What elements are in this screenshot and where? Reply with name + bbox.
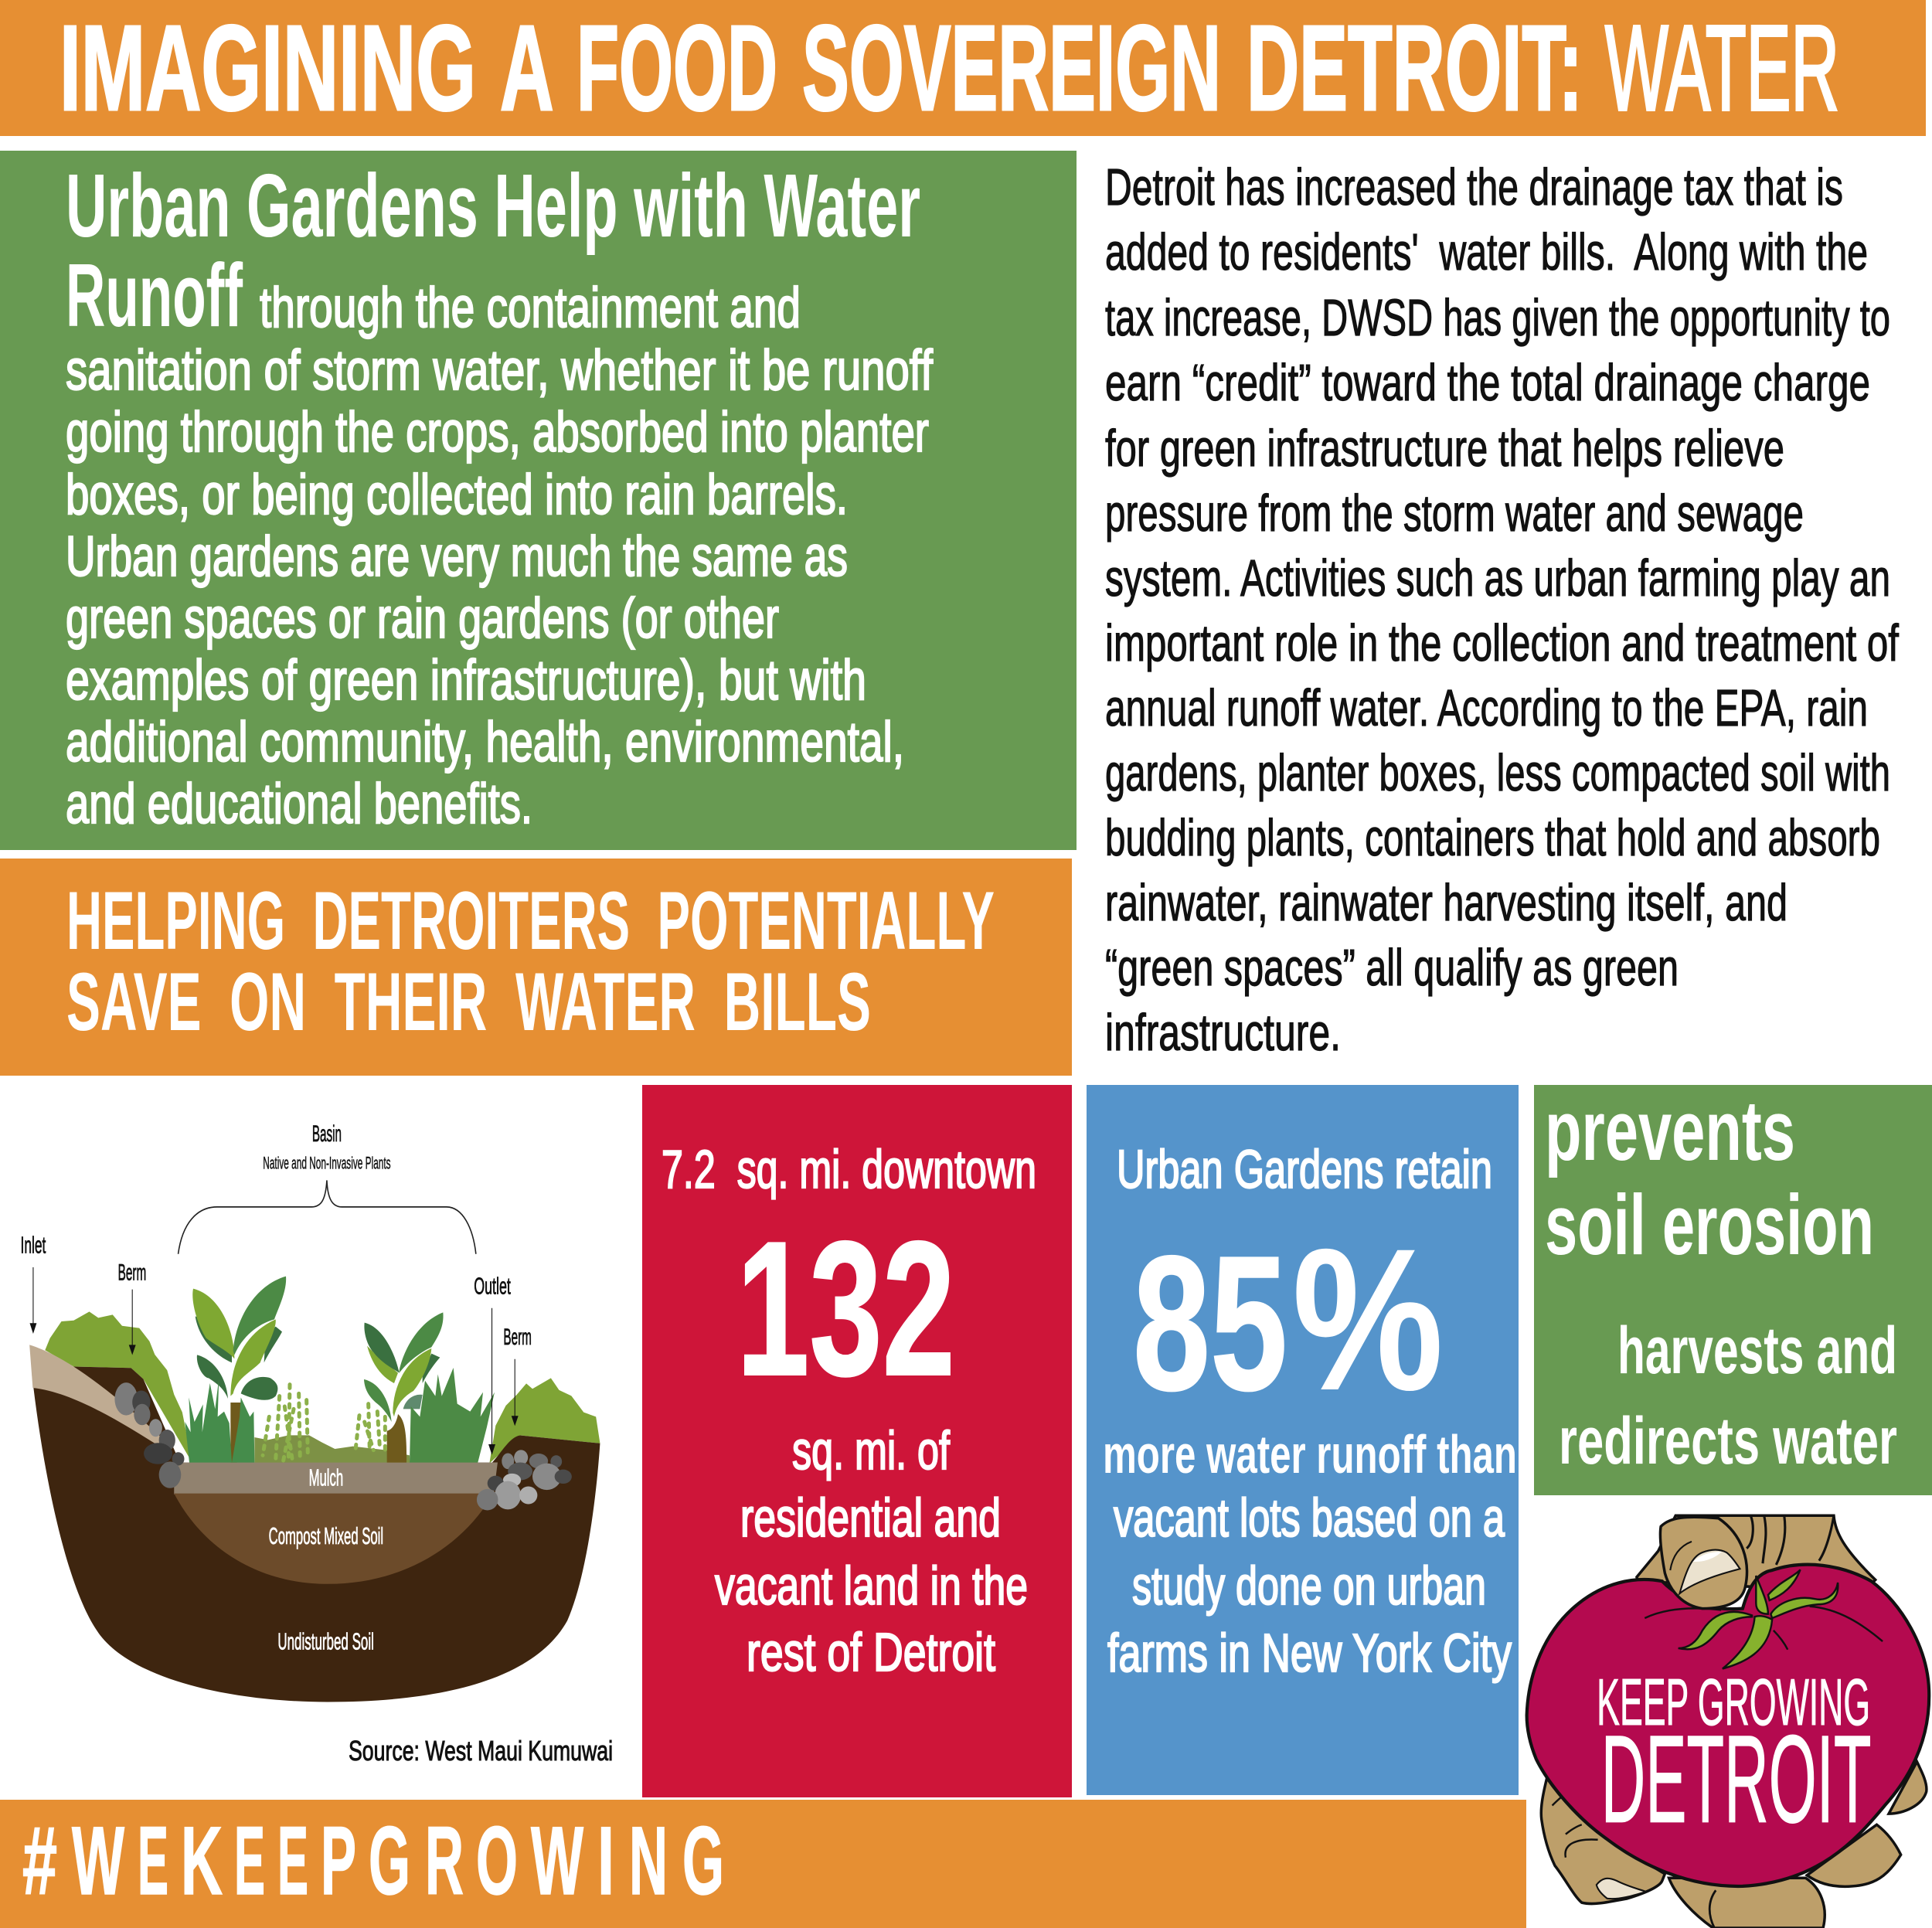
text block: drainage tax explanation [1105, 158, 1899, 1062]
left plant [185, 1277, 286, 1463]
hashtag banner: W [72, 1807, 124, 1915]
palm bottom [1669, 1878, 1825, 1928]
arrow: left berm [129, 1290, 135, 1354]
hashtag banner: # [22, 1807, 57, 1915]
panel: 132 square miles stat: 7.2 sq. mi. downtown [662, 1139, 1036, 1199]
right stones [477, 1450, 572, 1510]
hashtag banner: E [234, 1807, 265, 1915]
right plant [364, 1312, 495, 1463]
panel: 132 square miles stat [642, 1085, 1072, 1797]
title banner: DETROIT: [1247, 1, 1583, 136]
hashtag banner: N [629, 1807, 668, 1915]
diagram labels: Berm [503, 1324, 532, 1350]
title banner: IMAGINING [60, 1, 476, 136]
panel: 132 square miles stat: residential and [740, 1488, 1001, 1548]
hashtag banner: K [181, 1807, 223, 1915]
stones and annotations [20, 1121, 572, 1655]
berm vegetation [45, 1311, 600, 1464]
panel: urban gardens help with water runoff: sanitation of storm water, whether it be runoff [66, 339, 934, 402]
undisturbed soil, inlet channel, mulch and compost layers [29, 1345, 600, 1702]
hashtag banner: O [476, 1807, 518, 1915]
diagram labels: Compost Mixed Soil [269, 1523, 383, 1549]
diagram labels: Basin [312, 1121, 342, 1147]
plants and ground cover [185, 1277, 495, 1463]
panel: 132 square miles stat: sq. mi. of [792, 1420, 950, 1481]
diagram labels: Native and Non-Invasive Plants [263, 1154, 391, 1173]
panel: urban gardens help with water runoff: and educational benefits. [66, 773, 532, 835]
tomato stem leaves [1679, 1569, 1838, 1668]
hashtag banner [0, 1800, 1526, 1928]
panel: 85 percent stat [1087, 1085, 1519, 1795]
panel: 85 percent stat: study done on urban [1132, 1556, 1486, 1616]
panel: 85 percent stat: farms in New York City [1107, 1623, 1512, 1683]
lower right hand [1807, 1762, 1927, 1886]
panel: 85 percent stat: more water runoff than [1103, 1424, 1517, 1484]
panel: 85 percent stat: vacant lots based on a [1114, 1488, 1505, 1548]
panel: urban gardens help with water runoff: Urban Gardens Help with Water [66, 155, 920, 256]
hashtag banner: P [321, 1807, 356, 1915]
diagram labels: Mulch [309, 1464, 343, 1491]
title banner [0, 0, 1926, 136]
upper fingers [1637, 1515, 1876, 1592]
logo wordmark [1597, 1665, 1872, 1848]
panel: urban gardens help with water runoff: boxes, or being collected into rain barrels. [66, 464, 848, 526]
hashtag banner: G [369, 1807, 410, 1915]
panel: helping detroiters save on water bills [0, 859, 1072, 1076]
arrow: right berm [512, 1359, 518, 1425]
panel: helping detroiters save on water bills: HELPING DETROITERS POTENTIALLY [66, 874, 995, 967]
panel: 85 percent stat: 85 [1133, 1216, 1287, 1430]
shrubs [263, 1385, 385, 1460]
basin brace [179, 1180, 476, 1254]
panel: urban gardens help with water runoff: additional community, health, environmental, [66, 711, 904, 774]
hashtag banner: R [425, 1807, 464, 1915]
source credit: Source: West Maui Kumuwai [349, 1735, 613, 1766]
tomato body [1527, 1565, 1929, 1886]
arrow: outlet [489, 1308, 495, 1454]
hashtag banner: W [531, 1807, 583, 1915]
background ground cover [254, 1435, 410, 1463]
diagram labels: Berm [118, 1260, 146, 1286]
panel: urban gardens help with water runoff: Urban gardens are very much the same as [66, 525, 848, 588]
left stones [114, 1382, 184, 1488]
panel: 132 square miles stat: 132 [736, 1201, 955, 1416]
panel: urban gardens help with water runoff: going through the crops, absorbed into planter [66, 401, 929, 464]
hashtag banner: G [682, 1807, 724, 1915]
panel: urban gardens help with water runoff [0, 151, 1077, 850]
text block: drainage tax explanation: “green spaces” all qualify as green [1105, 939, 1679, 997]
title banner: A [500, 1, 552, 136]
tomato creases [1645, 1607, 1883, 1650]
title banner: SOVEREIGN [802, 1, 1221, 136]
panel: urban gardens help with water runoff: examples of green infrastructure), but with [66, 649, 866, 712]
diagram: rain garden cross-section [20, 1121, 613, 1766]
lower left hand [1541, 1778, 1665, 1904]
panel: prevents soil erosion [1534, 1083, 1932, 1495]
panel: 132 square miles stat: vacant land in the [715, 1556, 1028, 1616]
hashtag banner: E [277, 1807, 308, 1915]
thumb [1660, 1517, 1747, 1609]
arrow: inlet [30, 1267, 36, 1332]
diagram labels: Inlet [20, 1233, 46, 1259]
logo: keep growing detroit tomato in hands [1527, 1515, 1929, 1928]
panel: urban gardens help with water runoff: Runoff [66, 245, 243, 345]
hashtag banner: E [138, 1807, 168, 1915]
diagram labels: Undisturbed Soil [277, 1629, 374, 1655]
panel: helping detroiters save on water bills: SAVE ON THEIR WATER BILLS [66, 955, 871, 1048]
panel: urban gardens help with water runoff: green spaces or rain gardens (or other [66, 587, 779, 650]
panel: 85 percent stat: Urban Gardens retain [1117, 1139, 1492, 1199]
title banner: FOOD [577, 1, 777, 136]
text block: drainage tax explanation: infrastructure. [1105, 1004, 1341, 1062]
diagram labels: Outlet [474, 1273, 511, 1300]
panel: 85 percent stat: % [1292, 1206, 1444, 1433]
panel: urban gardens help with water runoff: through the containment and [260, 277, 801, 339]
panel: prevents soil erosion: prevents [1545, 1083, 1795, 1178]
panel: 132 square miles stat: rest of Detroit [747, 1622, 995, 1682]
hashtag banner: I [597, 1807, 614, 1915]
diagram labels [20, 1121, 532, 1655]
